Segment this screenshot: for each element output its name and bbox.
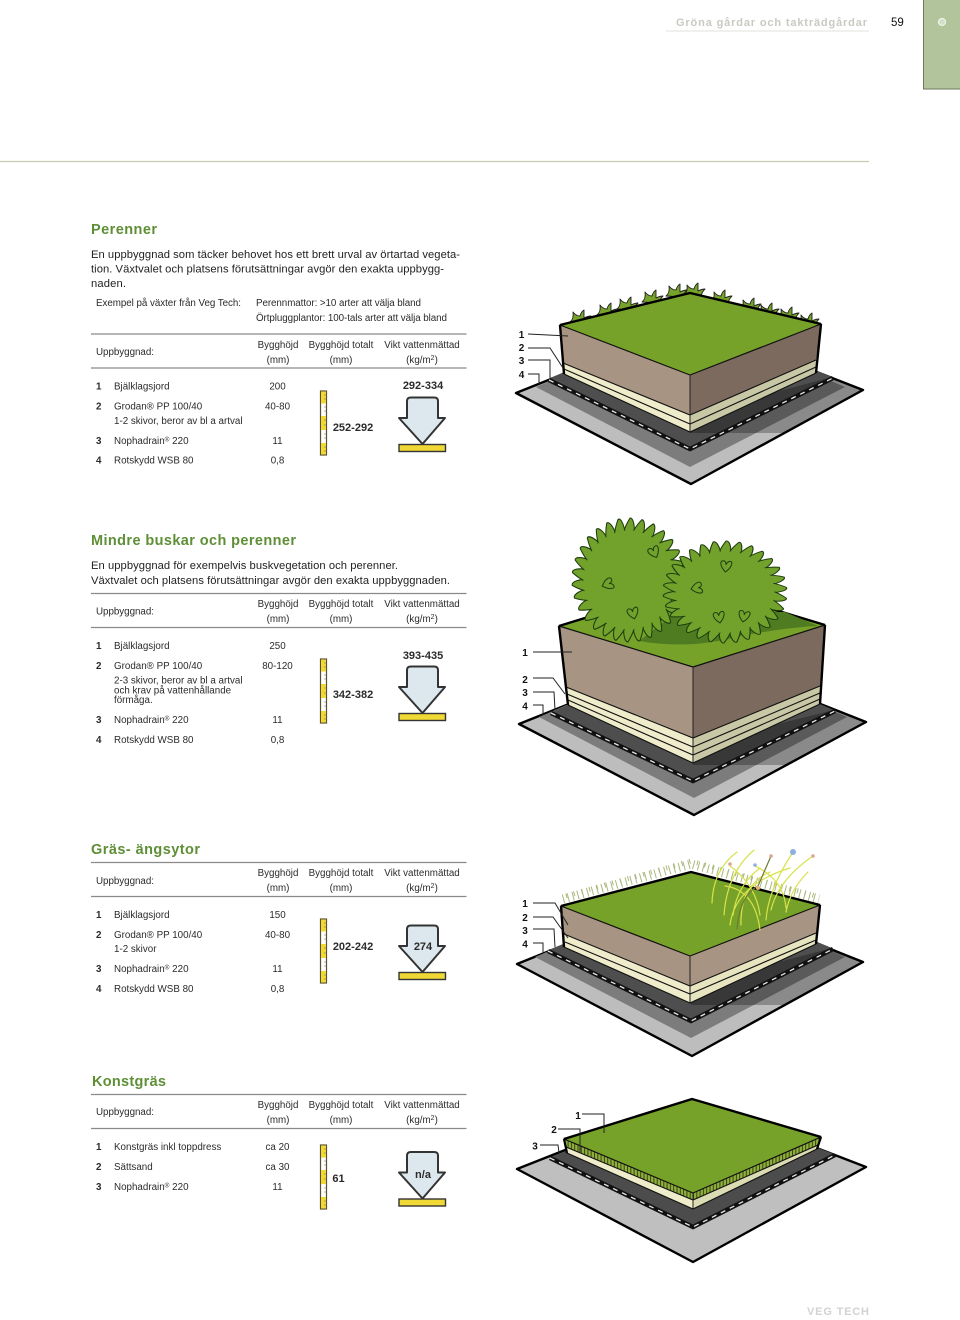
height ruler [320,919,326,983]
heading: Mindre buskar och perenner: Mindre buskar och perenner [91,533,296,549]
roof diagram with meadow [517,849,863,1056]
layer labels [522,899,568,953]
table rows: 3 [96,1182,102,1193]
table rows: 220 [169,436,189,447]
table header: Bygghöjd [258,599,298,610]
table header: Uppbyggnad: [96,606,154,618]
layer labels: 3 [532,1142,538,1152]
table rows: Bjälklagsjord [114,910,170,921]
table rows: Nophadrain [114,715,165,726]
table header [91,334,466,368]
meadow flowers [712,850,813,930]
right bush [663,541,787,643]
layer labels: 4 [522,940,528,950]
flower heads [728,849,815,890]
table rows: 200 [269,382,286,392]
table rows: ca 30 [266,1162,290,1173]
table rows: Rotskydd WSB 80 [114,456,194,466]
table header: Vikt vattenmättad [384,599,460,610]
table rows: och krav på vattenhållande [114,686,232,696]
body text [91,249,460,290]
table rows: 3 [96,715,102,726]
footer brand: VEG TECH [807,1306,869,1318]
table rows: 2 [96,930,102,941]
table rows: 1-2 skivor, beror av bl a artval [114,416,243,427]
table rows: 11 [272,715,283,726]
table rows: 0,8 [271,735,285,746]
table rows [96,382,291,466]
table header: Uppbyggnad: [96,347,154,358]
table header: (kg/m [406,355,431,366]
table header [91,594,466,628]
table rows: 40-80 [265,930,291,941]
table rows: ® [165,1182,170,1190]
table header: (kg/m [406,883,431,894]
table rows: 4 [96,984,102,995]
table header: (kg/m [406,1115,431,1126]
table header: Bygghöjd totalt [309,599,374,610]
table rows: 3 [96,436,102,447]
table rows: 40-80 [265,402,291,412]
table rows: 1 [96,910,102,921]
table rows: Rotskydd WSB 80 [114,735,194,746]
table rows: Nophadrain [114,1182,165,1193]
table header: ) [435,1115,438,1126]
table header: Bygghöjd totalt [309,340,374,351]
table rows: Grodan® PP 100/40 [114,402,203,412]
table header: 2 [431,614,435,621]
page header [666,0,960,89]
panel: gräs- ängsytor [91,842,863,1056]
table header: ) [435,614,438,625]
total height value: 61 [332,1173,345,1185]
table rows: 0,8 [271,984,285,995]
table header: Vikt vattenmättad [384,340,460,351]
table rows: 1-2 skivor [114,944,157,955]
table header: (mm) [330,1115,352,1126]
body text: Växtvalet och platsens förutsättningar avgör den exakta uppbyggnaden. [91,575,450,587]
table header: (mm) [330,883,352,894]
table rows: 11 [272,964,283,975]
panel: perenner [91,222,863,484]
body text: En uppbyggnad som täcker behovet hos ett brett urval av örtartad vegeta- [91,249,460,261]
table rows: 0,8 [271,456,285,466]
saturated weight value: 292-334 [403,380,444,392]
table rows: ® [165,964,170,972]
table rows: 2 [96,1162,102,1173]
table rows: Nophadrain [114,964,165,975]
saturated weight value: 393-435 [403,650,443,662]
table header: (mm) [330,355,352,366]
layer labels: 3 [522,688,528,699]
layer labels: 1 [519,330,525,341]
height ruler [320,391,326,455]
table rows: ca 20 [266,1142,290,1153]
heading: Gräs- ängsytor: Gräs- ängsytor [91,842,200,858]
layer labels: 2 [519,343,525,354]
table rows: 2-3 skivor, beror av bl a artval [114,676,243,686]
table rows [96,910,291,995]
height ruler [320,1145,326,1209]
panel: konstgräs [91,1074,866,1262]
layer labels [522,648,572,715]
layer labels: 1 [522,648,528,659]
table rows: Grodan® PP 100/40 [114,930,203,941]
table rows: 80-120 [262,661,293,672]
total height value: 252-292 [333,422,373,434]
table header: Bygghöjd [258,340,298,351]
table rows: Konstgräs inkl toppdress [114,1142,221,1153]
table header: Uppbyggnad: [96,1107,154,1118]
table rows [96,641,293,746]
heading: Perenner: Perenner [91,222,157,238]
panel: mindre buskar och perenner [91,518,866,815]
layer labels [519,330,568,384]
plant examples: Perennmattor: >10 arter att välja bland [256,298,421,309]
table rows: ® [165,714,170,722]
chapter title: Gröna gårdar och takträdgårdar [676,17,868,29]
saturated weight value: 274 [414,941,433,953]
table header: (mm) [267,1115,289,1126]
chapter tab [924,0,960,89]
table header: Bygghöjd totalt [309,868,374,879]
table header: (mm) [267,614,289,625]
plant examples: Örtpluggplantor: 100-tals arter att välja bland [256,313,447,324]
table header: (kg/m [406,614,431,625]
heading: Konstgräs: Konstgräs [92,1074,166,1090]
table header: (mm) [267,883,289,894]
table rows: Sättsand [114,1162,153,1173]
table header [91,862,466,896]
table rows: Grodan® PP 100/40 [114,661,203,672]
table rows: 1 [96,1142,102,1153]
layer labels: 3 [522,926,528,937]
layer labels [532,1111,604,1153]
table rows: 2 [96,402,102,412]
weight arrow [399,398,446,452]
total height value: 202-242 [333,941,373,953]
body text: En uppbyggnad för exempelvis buskvegetation och perenner. [91,560,398,572]
table header: 2 [431,1115,435,1122]
layer labels: 2 [522,675,528,686]
grass along back edges [563,861,819,899]
table rows: 150 [269,910,286,921]
table header: Vikt vattenmättad [384,868,460,879]
left bush [572,518,686,642]
layer labels: 2 [551,1125,557,1136]
table header: Bygghöjd totalt [309,1100,374,1111]
table rows: 4 [96,456,102,466]
table rows: ® [165,436,170,444]
table header: ) [435,883,438,894]
weight arrow [399,1152,446,1206]
turf fibres [564,1137,821,1200]
roof diagram with artificial turf [517,1099,866,1262]
table rows: Bjälklagsjord [114,641,170,652]
table header: Uppbyggnad: [96,876,154,887]
roof diagram with bushes [519,518,866,815]
weight arrow [399,926,446,980]
table rows: 220 [169,1182,189,1193]
table rows: 250 [269,641,286,652]
table header: (mm) [330,614,352,625]
table rows [96,1142,290,1193]
body text: tion. Växtvalet och platsens förutsättningar avgör den exakta uppbygg- [91,264,444,276]
roof diagram [516,283,863,484]
table rows: 220 [169,964,189,975]
saturated weight value: n/a [415,1169,432,1181]
layer labels: 3 [519,356,525,367]
table rows: Rotskydd WSB 80 [114,984,194,995]
table header: 2 [431,883,435,890]
height ruler [320,659,326,723]
table header: Vikt vattenmättad [384,1100,460,1111]
table rows: Bjälklagsjord [114,382,170,392]
plant examples: Exempel på växter från Veg Tech: [96,298,241,309]
table header: ) [435,355,438,366]
table header: (mm) [267,355,289,366]
table rows: 1 [96,641,102,652]
table header: Bygghöjd [258,868,298,879]
table header: Bygghöjd [258,1100,298,1111]
layer labels: 1 [522,899,528,910]
table rows: 11 [272,1182,283,1193]
table rows: 1 [96,382,102,392]
layer labels: 2 [522,913,528,924]
table rows: 220 [169,715,189,726]
body text: naden. [91,278,126,290]
layer labels: 4 [519,370,525,381]
table rows: 3 [96,964,102,975]
table header: 2 [431,355,435,362]
weight arrow [399,666,446,720]
page number: 59 [891,17,904,29]
table rows: Nophadrain [114,436,165,447]
total height value: 342-382 [333,689,373,701]
table rows: 4 [96,735,102,746]
layer labels: 1 [575,1111,581,1122]
table header [91,1094,466,1128]
plant examples [96,298,447,324]
table rows: förmåga. [114,695,153,706]
table rows: 2 [96,661,102,672]
body text [91,560,450,587]
layer labels: 4 [522,702,528,712]
table rows: 11 [272,436,283,447]
